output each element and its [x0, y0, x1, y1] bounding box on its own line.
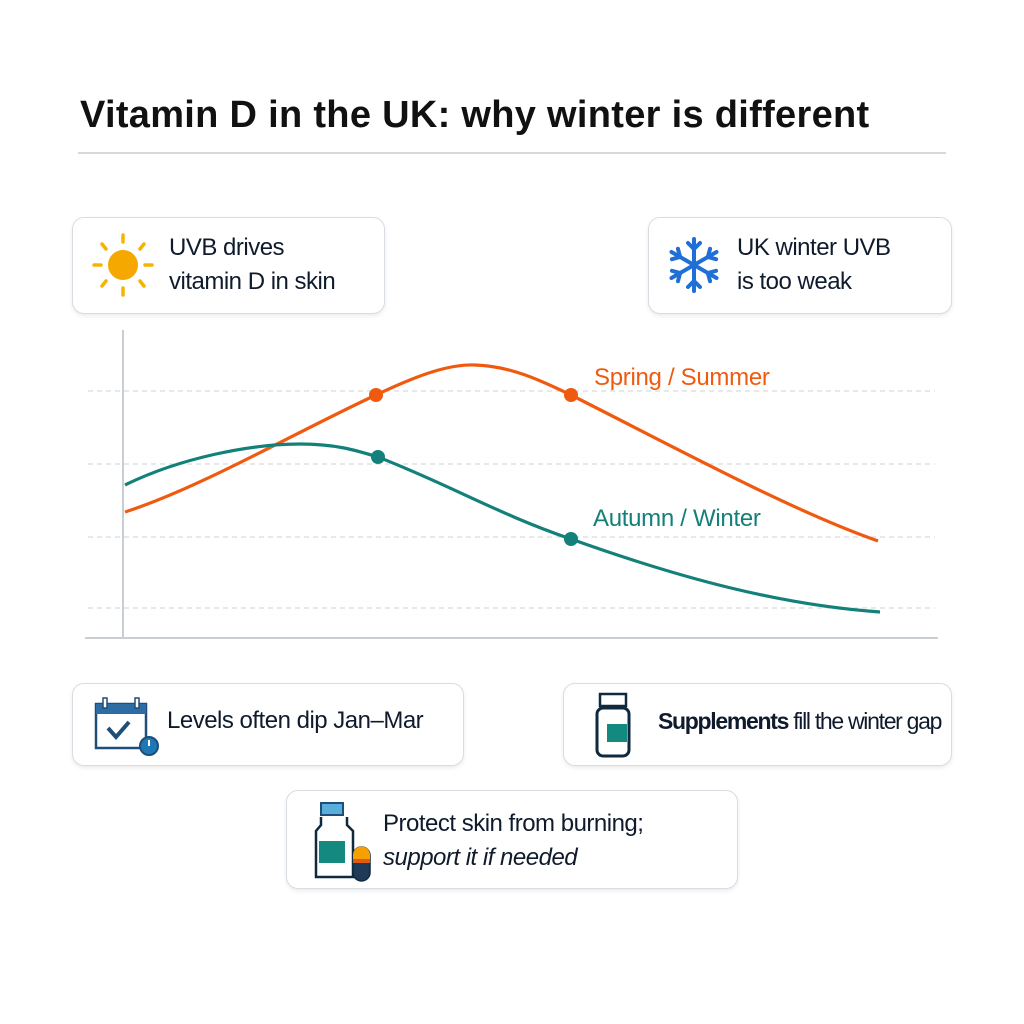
text: UVB drives: [169, 234, 284, 261]
text: Levels often dip Jan–Mar: [167, 707, 423, 734]
text: [169, 234, 335, 295]
series: autumn/winter: Autumn / Winter: [593, 505, 761, 532]
text: UK winter UVB: [737, 234, 891, 261]
text: support it if needed: [383, 844, 577, 871]
line chart: [85, 330, 938, 639]
text: Protect skin from burning;: [383, 810, 643, 837]
series: spring/summer: Spring / Summer: [594, 364, 770, 391]
callout: UK winter UVB: [648, 217, 952, 314]
callout: levels dip: [72, 683, 464, 766]
text: is too weak: [737, 268, 852, 295]
title: Vitamin D in the UK: why winter is different: [80, 94, 869, 136]
icon: snowflake: [669, 237, 719, 293]
icon: bottle and capsule: [314, 802, 371, 882]
text: [383, 810, 643, 871]
series: spring/summer: [125, 364, 878, 541]
text: vitamin D in skin: [169, 268, 335, 295]
callout: supplements: [563, 683, 952, 766]
callout: protect skin: [286, 790, 738, 889]
callout: UVB drives vitamin D: [72, 217, 385, 314]
text: [737, 234, 891, 295]
series: autumn/winter: [125, 444, 880, 612]
icon: calendar: [94, 697, 159, 756]
text: Supplements fill the winter gap: [658, 708, 941, 734]
icon: bottle: [596, 692, 630, 758]
icon: sun: [92, 233, 154, 297]
